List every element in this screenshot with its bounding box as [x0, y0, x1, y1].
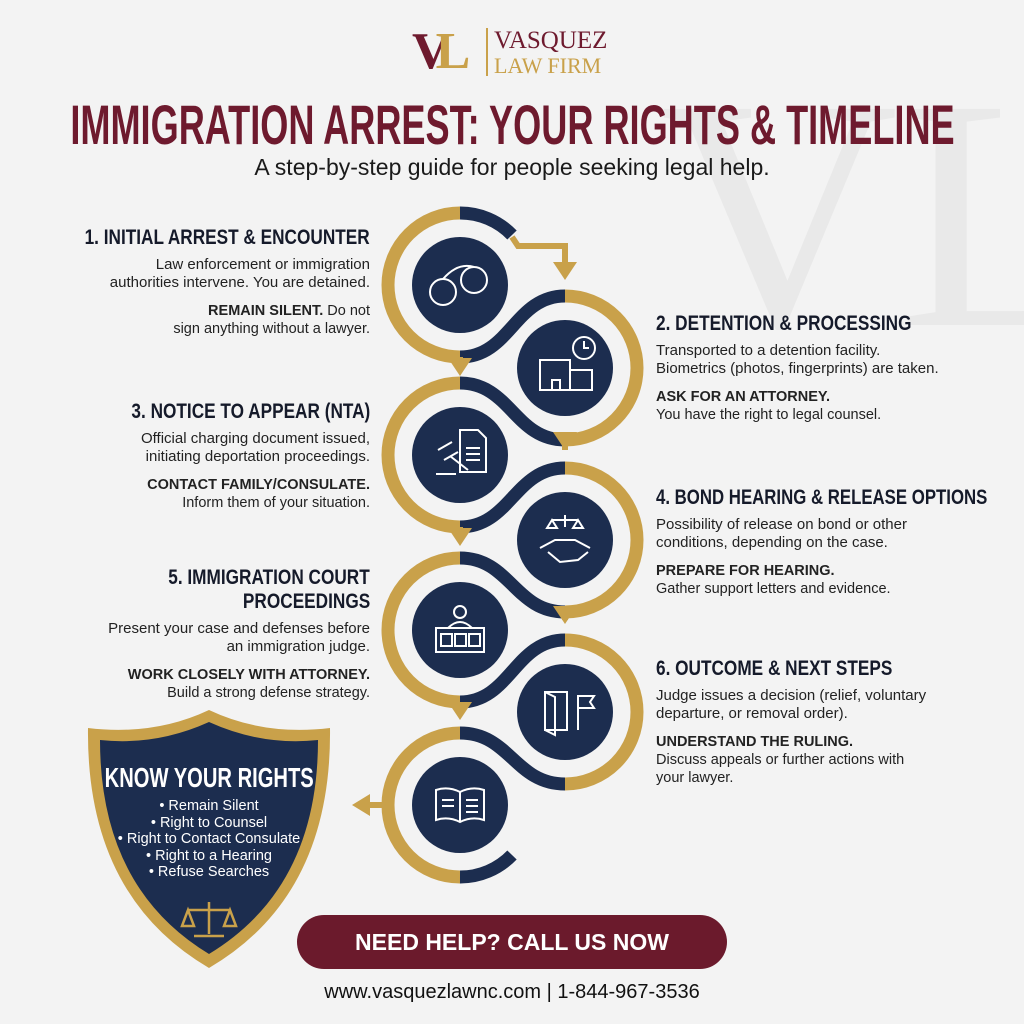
title: IMMIGRATION ARREST: YOUR RIGHTS & TIMELINE [70, 93, 954, 156]
step 6: UNDERSTAND THE RULING. [656, 734, 853, 750]
subtitle: A step-by-step guide for people seeking legal help. [254, 154, 770, 180]
step 4: 4. BOND HEARING & RELEASE OPTIONS [656, 486, 987, 509]
step 1: sign anything without a lawyer. [173, 321, 370, 337]
step 3: initiating deportation proceedings. [146, 448, 370, 465]
step 6: 6. OUTCOME & NEXT STEPS [656, 657, 892, 680]
step 2: You have the right to legal counsel. [656, 407, 881, 423]
logo [412, 23, 607, 80]
step 1: REMAIN SILENT. Do not [208, 303, 370, 319]
step 4: PREPARE FOR HEARING. [656, 563, 835, 579]
step 1: 1. INITIAL ARREST & ENCOUNTER [85, 226, 370, 249]
logo: LAW FIRM [494, 53, 601, 78]
step 6 [656, 657, 926, 786]
shield: know your rights: KNOW YOUR RIGHTS [104, 762, 314, 793]
icon: building [540, 337, 595, 390]
step 2 [656, 312, 939, 423]
shield: know your rights: • Right to Contact Consulate [118, 831, 300, 847]
step 4 [656, 486, 987, 597]
cta button: NEED HELP? CALL US NOW [355, 929, 669, 955]
step 5: PROCEEDINGS [243, 590, 370, 613]
step 4: Gather support letters and evidence. [656, 581, 891, 597]
step 3: Official charging document issued, [141, 430, 370, 447]
logo: VASQUEZ [494, 27, 607, 54]
shield: know your rights: • Right to a Hearing [146, 848, 272, 864]
step 2: ASK FOR AN ATTORNEY. [656, 389, 830, 405]
step 5 [108, 566, 370, 701]
step 4: Possibility of release on bond or other [656, 516, 907, 533]
step 1: authorities intervene. You are detained. [110, 274, 370, 291]
icon: scales handshake [540, 515, 590, 562]
step 2: Transported to a detention facility. [656, 342, 880, 359]
cta button [297, 915, 727, 969]
step 2: 2. DETENTION & PROCESSING [656, 312, 911, 335]
step 2: Biometrics (photos, fingerprints) are taken. [656, 360, 939, 377]
step 3 [131, 400, 370, 511]
shield: know your rights: • Refuse Searches [149, 864, 269, 880]
shield: know your rights [88, 710, 330, 968]
step 3: Inform them of your situation. [182, 495, 370, 511]
step 6: Discuss appeals or further actions with [656, 752, 904, 768]
step 3: 3. NOTICE TO APPEAR (NTA) [131, 400, 370, 423]
footer contact: www.vasquezlawnc.com | 1-844-967-3536 [324, 981, 700, 1003]
step 5: Present your case and defenses before [108, 620, 370, 637]
step 6: departure, or removal order). [656, 705, 848, 722]
step 3: CONTACT FAMILY/CONSULATE. [147, 477, 370, 493]
icon: handcuffs [430, 266, 487, 305]
step 5: an immigration judge. [227, 638, 370, 655]
step 6: Judge issues a decision (relief, voluntary [656, 687, 926, 704]
step 1 [85, 226, 370, 337]
logo: VL [412, 23, 470, 80]
shield: know your rights: • Remain Silent [159, 798, 259, 814]
step 1: Law enforcement or immigration [156, 256, 370, 273]
step 4: conditions, depending on the case. [656, 534, 888, 551]
icon: courtroom [436, 606, 484, 652]
shield: know your rights: • Right to Counsel [151, 814, 267, 830]
step 5: Build a strong defense strategy. [167, 685, 370, 701]
step 5: WORK CLOSELY WITH ATTORNEY. [128, 667, 370, 683]
step 6: your lawyer. [656, 770, 733, 786]
icon: door flag [545, 692, 594, 735]
step 5: 5. IMMIGRATION COURT [168, 566, 370, 589]
icon: gavel doc [436, 430, 486, 474]
icon: book [436, 788, 484, 822]
